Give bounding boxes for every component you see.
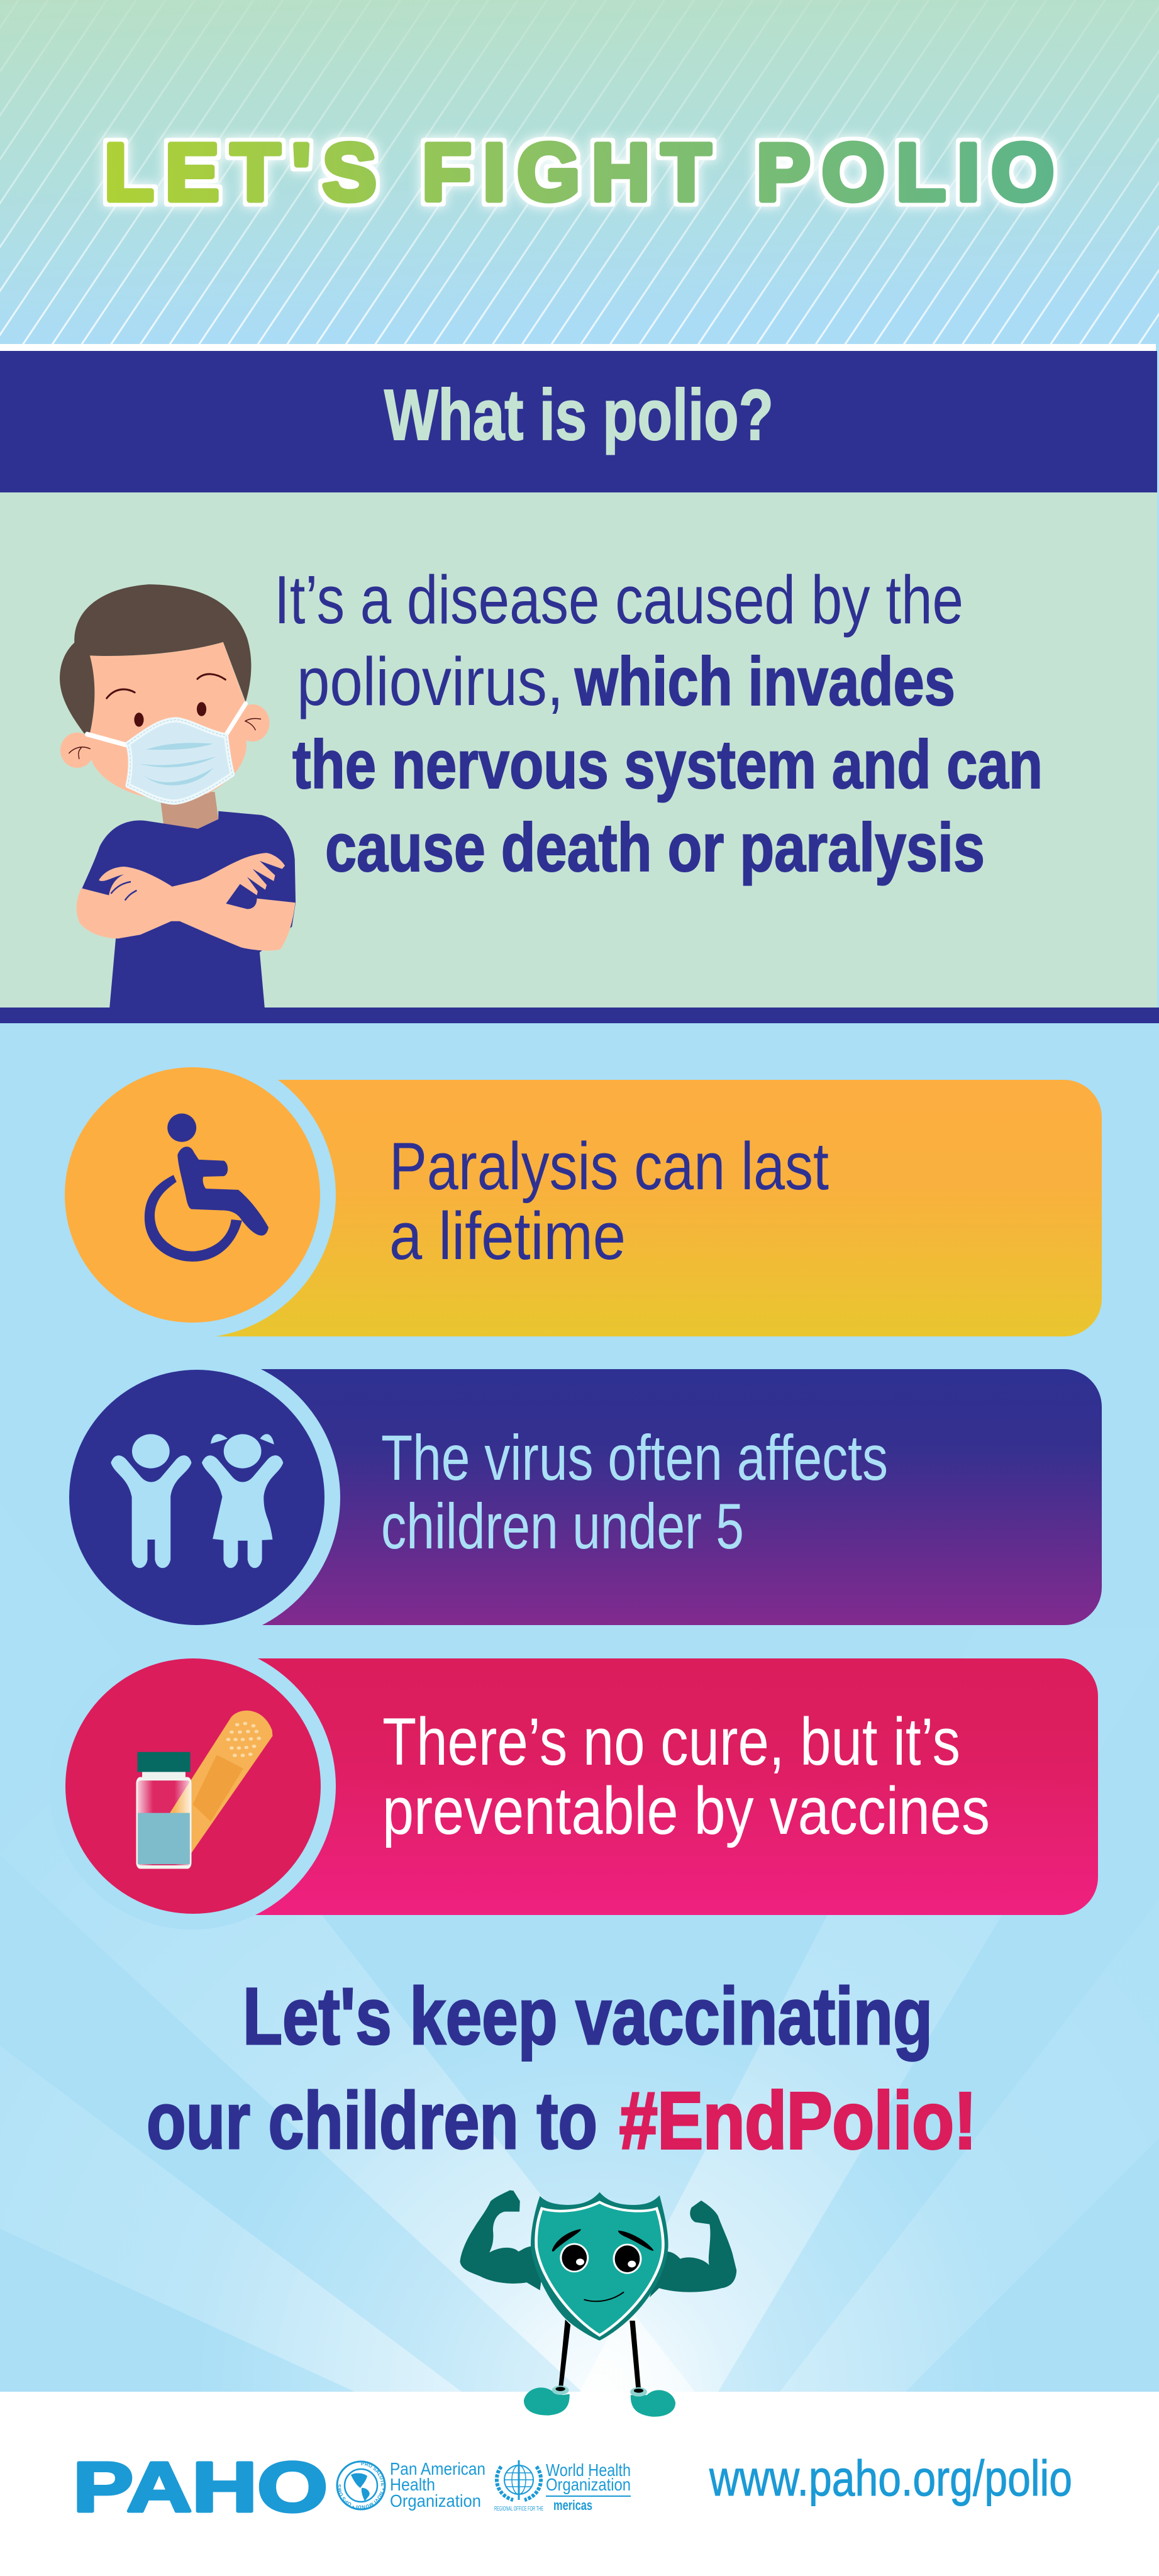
card text: a lifetime (389, 1198, 626, 1274)
navy divider (0, 1008, 1159, 1023)
PAHO name: Health (390, 2475, 435, 2494)
shield mascot (460, 2190, 736, 2417)
white divider (0, 344, 1156, 351)
definition text: It’s a disease caused by the (274, 562, 963, 638)
panel: footer (0, 2392, 1159, 2576)
WHO name (494, 2460, 631, 2513)
card text (389, 1128, 829, 1274)
PAHO wordmark: PAHO (73, 2448, 328, 2526)
PAHO name: Organization (390, 2491, 481, 2511)
call to action: #EndPolio! (619, 2076, 977, 2166)
card: children under 5 (53, 1354, 1102, 1641)
definition text (274, 562, 1043, 886)
title: LET'S FIGHT POLIO (104, 128, 1054, 218)
call to action (147, 1972, 977, 2166)
card text: Paralysis can last (389, 1128, 829, 1204)
WHO name: Organization (546, 2475, 631, 2494)
panel: what is polio heading (0, 351, 1157, 492)
definition text: poliovirus, (297, 643, 563, 720)
definition text: cause death or paralysis (325, 809, 985, 886)
card text: The virus often affects (381, 1422, 888, 1494)
card text (381, 1422, 888, 1562)
card text: children under 5 (381, 1491, 744, 1562)
icon: WHO emblem (497, 2460, 541, 2500)
call to action: Let's keep vaccinating (243, 1972, 933, 2062)
WHO name: REGIONAL OFFICE FOR THE (494, 2506, 543, 2512)
icon: vaccine vial and bandage (137, 1711, 272, 1867)
icon: PAHO seal: PRO SALUTE * NOVI MUNDI * OPS OMS (338, 2463, 384, 2508)
card text: preventable by vaccines (382, 1773, 990, 1848)
website URL: www.paho.org/polio (709, 2450, 1072, 2506)
PAHO name: Pan American (390, 2459, 485, 2479)
panel: what is polio heading: What is polio? (384, 375, 774, 455)
panel: title banner (0, 0, 1159, 344)
card: paralysis (49, 1052, 1102, 1338)
call to action: our children to (147, 2076, 597, 2166)
card text: There’s no cure, but it’s (382, 1704, 960, 1779)
icon: wheelchair (145, 1113, 269, 1262)
card text (382, 1704, 990, 1848)
panel: definition (0, 492, 1157, 1009)
definition text: which invades (574, 643, 955, 720)
card: vaccines (49, 1643, 1098, 1929)
boy with face mask (60, 584, 296, 1009)
PAHO name (390, 2459, 485, 2511)
icon: children (111, 1434, 283, 1568)
background light rays (0, 1504, 1159, 2392)
WHO name: World Health (546, 2460, 631, 2480)
WHO name: mericas (553, 2497, 592, 2513)
